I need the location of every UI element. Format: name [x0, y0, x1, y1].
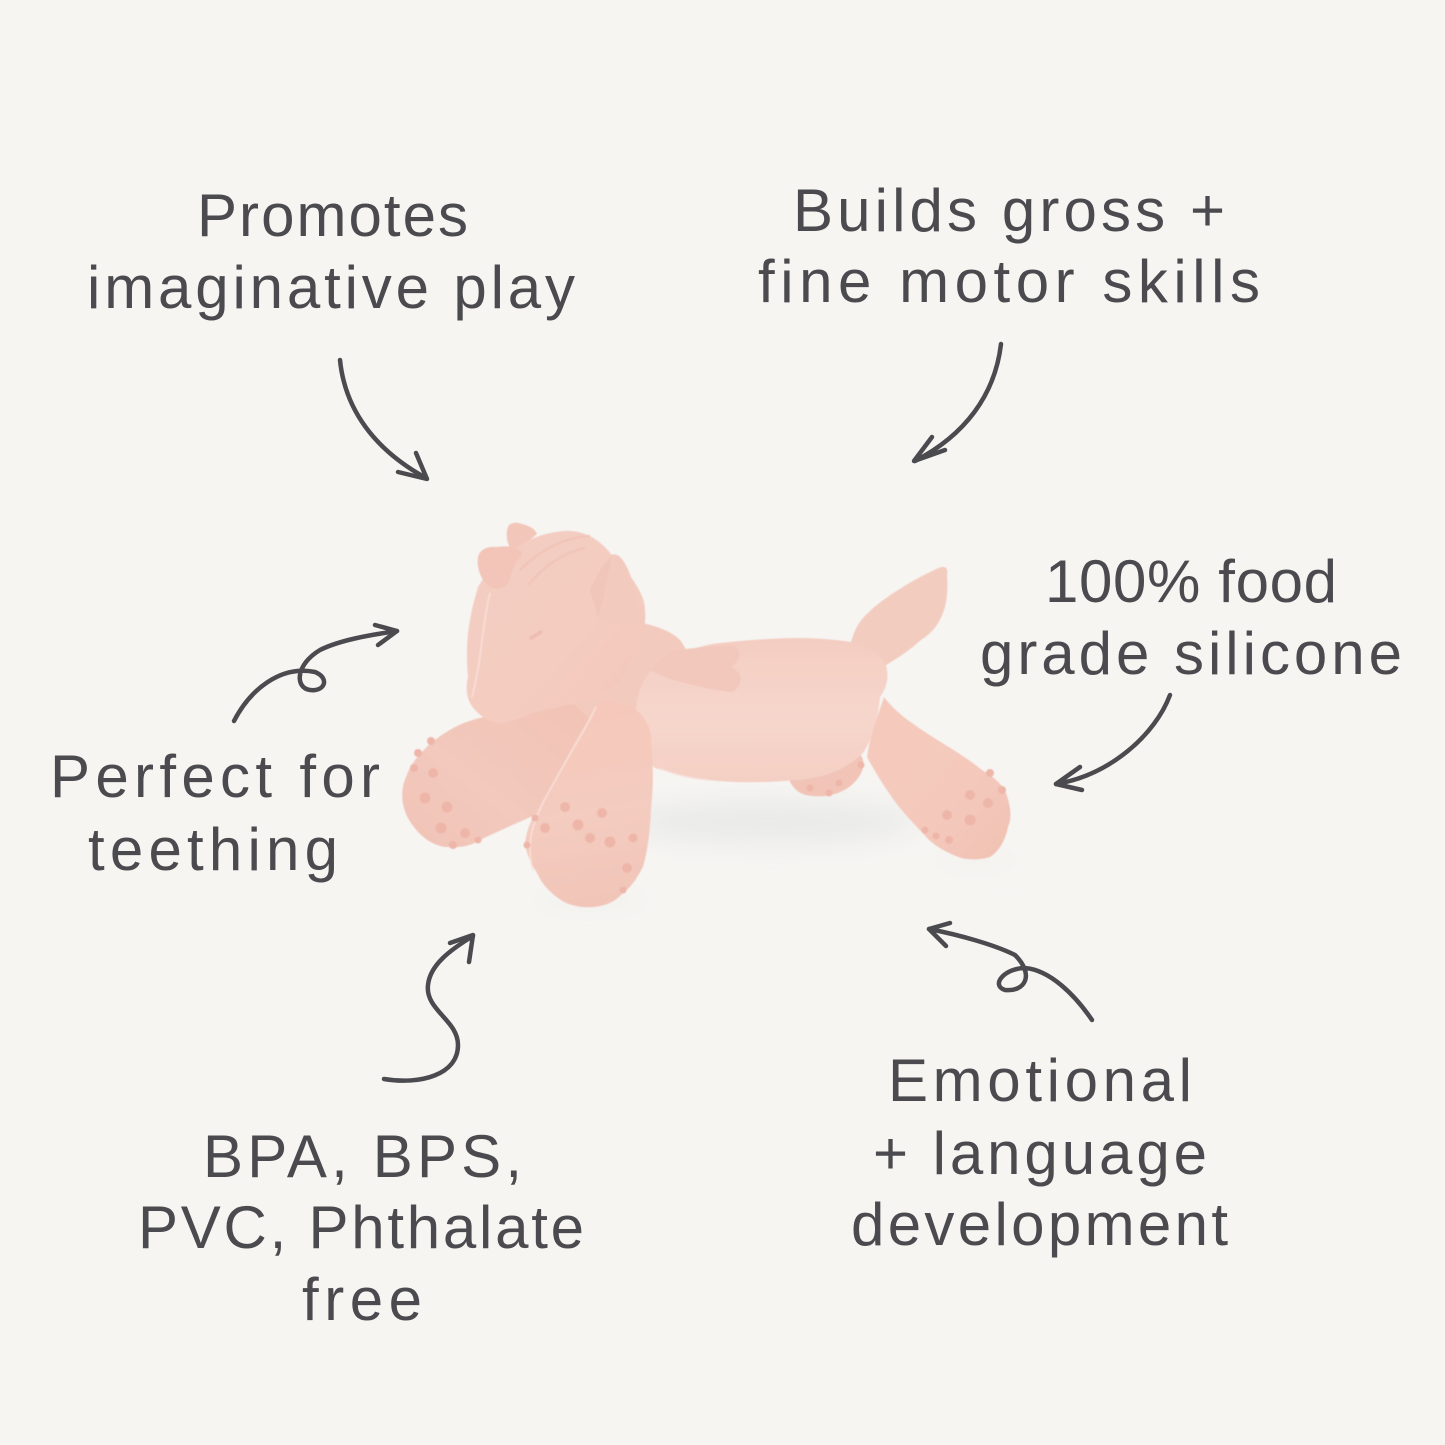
mane ridges	[520, 536, 590, 585]
back right leg	[867, 697, 1010, 859]
head	[467, 531, 645, 723]
callout: food grade silicone: grade silicone	[980, 620, 1402, 687]
callout: builds motor skills: Builds gross +	[793, 177, 1225, 244]
toy: pink balloon animal teether	[402, 523, 1020, 908]
callout: builds motor skills: fine motor skills	[758, 248, 1260, 315]
callout: emotional and language development: development	[851, 1191, 1228, 1258]
callout: promotes imaginative play	[87, 182, 575, 321]
eye	[531, 632, 541, 638]
callout: food grade silicone	[980, 548, 1402, 687]
far back leg	[790, 750, 864, 796]
arrow: bottom left squiggle	[384, 935, 473, 1081]
ear	[590, 554, 637, 626]
arrow: left curly	[234, 625, 397, 721]
callout: builds motor skills	[758, 177, 1260, 315]
tail	[851, 567, 947, 665]
head seam	[472, 593, 490, 697]
wing	[651, 645, 741, 692]
rear horn	[507, 523, 537, 548]
body	[636, 638, 887, 782]
callout: BPA free	[138, 1123, 584, 1333]
arrow: right	[1056, 695, 1170, 790]
front horn	[478, 546, 522, 589]
arrow: top left	[340, 360, 427, 479]
callout: promotes imaginative play: imaginative play	[87, 254, 575, 321]
callout: food grade silicone: 100% food	[1045, 548, 1337, 615]
far front leg	[402, 700, 590, 849]
callout: emotional and language development: + language	[873, 1120, 1207, 1187]
arrow: bottom right curly	[929, 923, 1092, 1020]
callout: BPA free: PVC, Phthalate	[138, 1194, 584, 1261]
callout: BPA free: BPA, BPS,	[203, 1123, 522, 1190]
callout: emotional and language development: Emotional	[888, 1047, 1192, 1114]
body seam	[659, 768, 708, 780]
callout: perfect for teething: teething	[88, 816, 338, 883]
callout: promotes imaginative play: Promotes	[197, 182, 468, 249]
callout: emotional and language development	[851, 1047, 1228, 1258]
near front leg	[524, 700, 653, 907]
callout: perfect for teething: Perfect for	[50, 743, 380, 810]
arrow: top right	[914, 344, 1001, 461]
neck	[570, 620, 688, 730]
shadow	[530, 798, 1020, 908]
callout: perfect for teething	[50, 743, 380, 883]
callout: BPA free: free	[302, 1266, 422, 1333]
